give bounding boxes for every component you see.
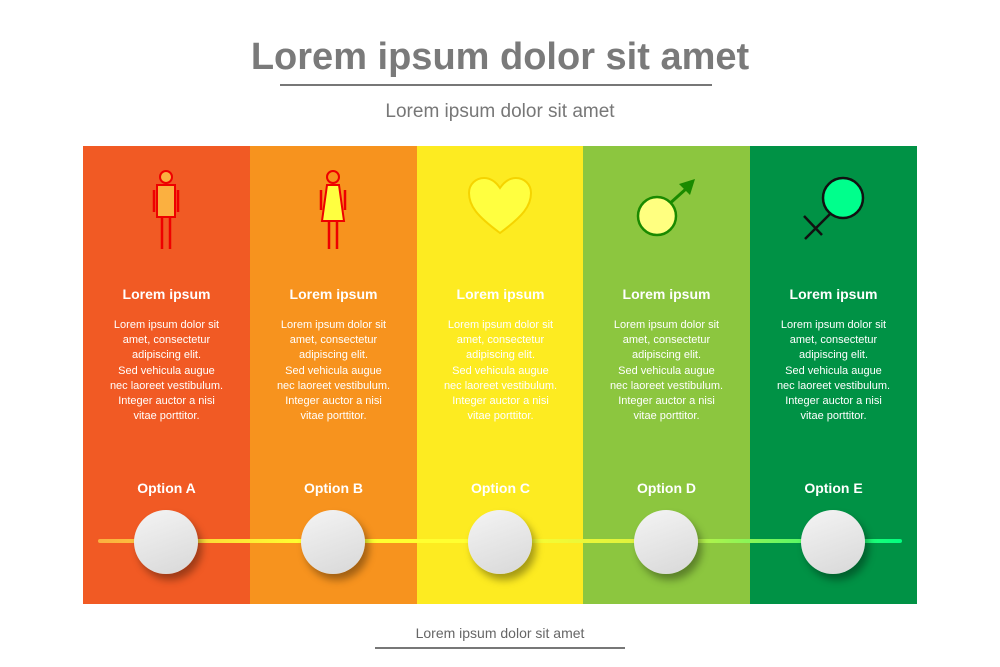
text D: Lorem ipsum dolor sit <box>614 319 719 331</box>
text A: Lorem ipsum dolor sit <box>114 319 219 331</box>
text C: Integer auctor a nisi <box>452 395 549 407</box>
text A: nec laoreet vestibulum. <box>110 380 223 392</box>
option B: Option B <box>304 480 363 496</box>
heading A: Lorem ipsum <box>123 286 210 302</box>
text B: Sed vehicula augue <box>285 365 382 377</box>
text E: vitae porttitor. <box>800 410 867 422</box>
text E: Lorem ipsum dolor sit <box>781 319 886 331</box>
panel: B <box>250 146 417 604</box>
text C: adipiscing elit. <box>466 349 535 361</box>
text E: amet, consectetur <box>790 334 877 346</box>
panel: C <box>417 146 584 604</box>
icon: man <box>152 170 180 249</box>
text D: adipiscing elit. <box>632 349 701 361</box>
footer text: Lorem ipsum dolor sit amet <box>416 625 584 641</box>
panel: E <box>750 146 917 604</box>
icon: female symbol <box>803 176 864 240</box>
text C: amet, consectetur <box>457 334 544 346</box>
heading C: Lorem ipsum <box>457 286 544 302</box>
text E: adipiscing elit. <box>799 349 868 361</box>
text B: adipiscing elit. <box>299 349 368 361</box>
text A: vitae porttitor. <box>133 410 200 422</box>
option C: Option C <box>471 480 530 496</box>
panel: A <box>83 146 250 604</box>
text E: Integer auctor a nisi <box>785 395 882 407</box>
text C: Lorem ipsum dolor sit <box>448 319 553 331</box>
icon: male symbol <box>636 179 695 236</box>
timeline circles <box>133 510 874 585</box>
heading E: Lorem ipsum <box>790 286 877 302</box>
text D: amet, consectetur <box>623 334 710 346</box>
icon: heart <box>468 177 532 234</box>
text A: Integer auctor a nisi <box>118 395 215 407</box>
text B: Integer auctor a nisi <box>285 395 382 407</box>
text E: Sed vehicula augue <box>785 365 882 377</box>
title underline <box>280 84 712 86</box>
text E: nec laoreet vestibulum. <box>777 380 890 392</box>
heading D: Lorem ipsum <box>623 286 710 302</box>
text D: nec laoreet vestibulum. <box>610 380 723 392</box>
title: Lorem ipsum dolor sit amet <box>251 36 749 78</box>
text A <box>110 319 223 422</box>
text E <box>777 319 890 422</box>
text B: amet, consectetur <box>290 334 377 346</box>
icon: woman <box>320 170 346 249</box>
text C: Sed vehicula augue <box>452 365 549 377</box>
text D: vitae porttitor. <box>633 410 700 422</box>
text A: Sed vehicula augue <box>118 365 215 377</box>
footer line <box>375 647 625 649</box>
subtitle: Lorem ipsum dolor sit amet <box>385 101 615 122</box>
option E: Option E <box>804 480 863 496</box>
text B: vitae porttitor. <box>300 410 367 422</box>
text A: amet, consectetur <box>123 334 210 346</box>
heading B: Lorem ipsum <box>290 286 377 302</box>
timeline line <box>98 539 902 543</box>
option D: Option D <box>637 480 696 496</box>
option A: Option A <box>137 480 196 496</box>
text A: adipiscing elit. <box>132 349 201 361</box>
panel: D <box>583 146 750 604</box>
text B <box>277 319 390 422</box>
text C: nec laoreet vestibulum. <box>444 380 557 392</box>
text B: Lorem ipsum dolor sit <box>281 319 386 331</box>
text B: nec laoreet vestibulum. <box>277 380 390 392</box>
text D <box>610 319 723 422</box>
text C: vitae porttitor. <box>467 410 534 422</box>
text D: Sed vehicula augue <box>618 365 715 377</box>
text D: Integer auctor a nisi <box>618 395 715 407</box>
text C <box>444 319 557 422</box>
